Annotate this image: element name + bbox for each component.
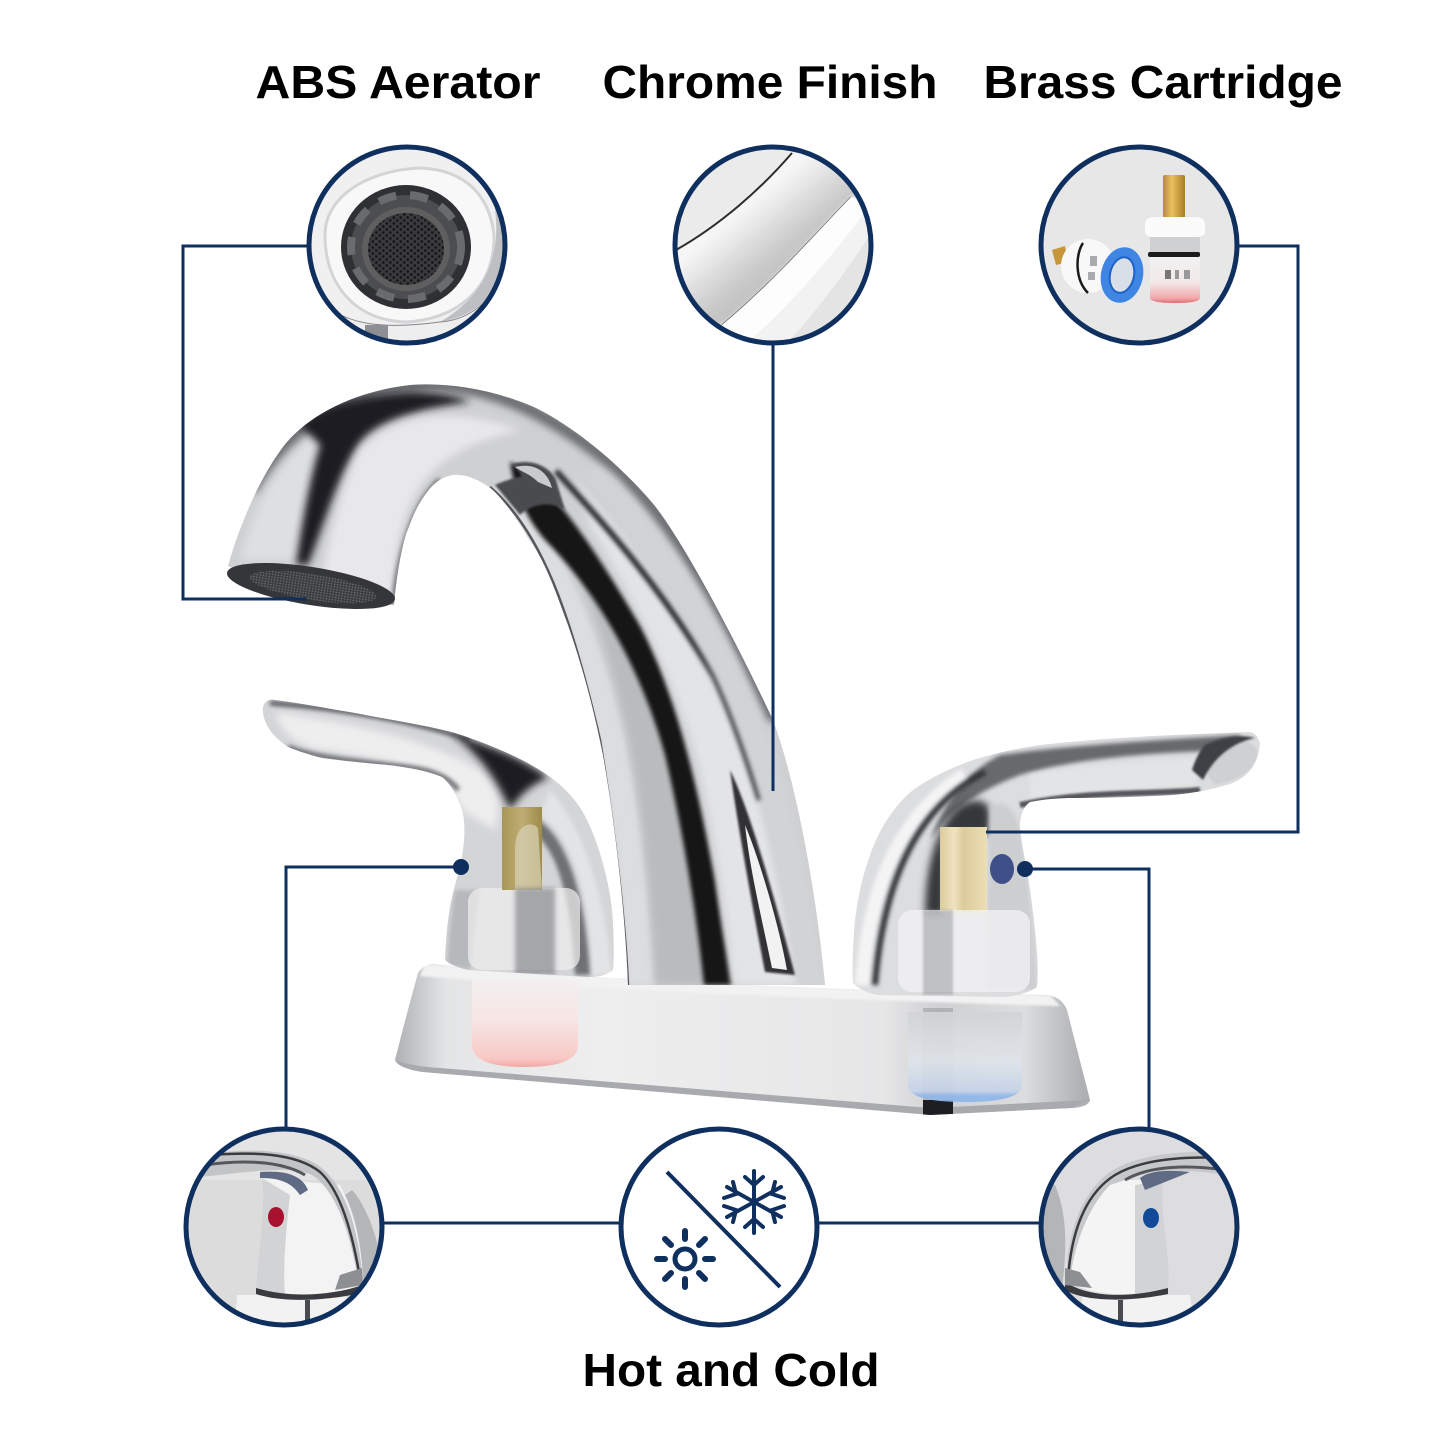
hot base [235, 1295, 360, 1330]
spout head light left [242, 440, 318, 560]
hot cartridge below deck [472, 980, 578, 1067]
cartridge upright [1145, 175, 1205, 303]
spout head dark band [296, 392, 470, 565]
hot handle body [256, 1178, 363, 1294]
circle: cold handle [1040, 1130, 1240, 1330]
left cartridge [468, 807, 580, 975]
base reflection [923, 1008, 953, 1120]
right ridge light [575, 480, 799, 985]
column inner edge line [490, 487, 628, 985]
spout inner edge shade [394, 480, 440, 605]
spout top edge shade [250, 384, 775, 720]
cartridge lying [1052, 239, 1148, 307]
cold marker [990, 854, 1014, 884]
handle dome outer highlight [862, 775, 965, 985]
dot: cold callout [1017, 861, 1033, 877]
hot rim [256, 1285, 363, 1300]
circle: hot handle [185, 1130, 385, 1330]
dot: hot callout [453, 859, 469, 875]
cold marker [1143, 1208, 1159, 1228]
column mid grey [582, 586, 704, 985]
handle dark shoulder [450, 733, 548, 810]
line: cold handle callout [1025, 869, 1149, 1132]
column left light band [490, 487, 655, 985]
cold rim [1065, 1282, 1168, 1300]
handle arm highlight [275, 712, 498, 830]
heading: Brass Cartridge: Brass Cartridge [984, 56, 1342, 108]
inner arch [542, 819, 592, 977]
spout [220, 380, 840, 990]
spout head highlight [320, 416, 520, 600]
handle dome dark line [875, 772, 985, 985]
line: cartridge callout [986, 246, 1298, 832]
left handle (hot) [255, 695, 620, 985]
handle bottom shade [288, 747, 458, 790]
handle tip [1208, 742, 1258, 784]
line: chrome callout [772, 342, 774, 791]
hot marker [268, 1207, 284, 1227]
circle: aerator detail [305, 145, 512, 350]
column dark band [510, 462, 732, 985]
junction reflection [495, 462, 565, 515]
icon: snowflake [724, 1171, 784, 1233]
aerator [224, 554, 398, 618]
faucet [220, 380, 1265, 1120]
handle arm light [1032, 773, 1036, 774]
handle arm lower shade [1020, 790, 1200, 805]
cold base [1082, 1295, 1195, 1330]
handle arm dark top [930, 735, 1240, 840]
icon: divider slash [667, 1172, 780, 1287]
line: centre to right circle [816, 1222, 1042, 1224]
connector lines [183, 246, 1298, 1223]
lower loop highlight [745, 825, 787, 970]
right handle (cold) [850, 725, 1265, 1000]
heading: Chrome Finish: Chrome Finish [602, 56, 938, 108]
cold arm [1066, 1152, 1228, 1280]
icon: sun [657, 1231, 713, 1287]
circle: cartridge detail [1035, 145, 1245, 350]
hot arm [196, 1151, 363, 1280]
handle body dark band [925, 801, 990, 915]
handle right light [540, 790, 612, 975]
handle top edge [270, 703, 470, 740]
right outer highlight [653, 524, 766, 802]
body right [985, 804, 1037, 990]
lower dark streak [730, 770, 795, 975]
chrome main band [670, 150, 880, 325]
right ridge shadow [556, 471, 760, 800]
chrome lower strips [722, 197, 870, 345]
circle: chrome detail [670, 140, 880, 350]
circle: hot and cold icon [622, 1130, 816, 1324]
handle lower left [447, 890, 480, 970]
line: hot handle callout [286, 867, 461, 1132]
heading: Hot and Cold: Hot and Cold [582, 1344, 880, 1396]
chrome upper panel [670, 140, 792, 255]
line: left circle to centre [380, 1222, 622, 1224]
line: aerator callout [183, 246, 310, 599]
circle outlines [186, 147, 1237, 1325]
heading: ABS Aerator: ABS Aerator [256, 56, 541, 108]
cold cartridge below deck [908, 1012, 1022, 1102]
right cartridge [898, 827, 1030, 995]
cold handle body [1065, 1180, 1169, 1294]
faucet base plate [390, 960, 1095, 1120]
